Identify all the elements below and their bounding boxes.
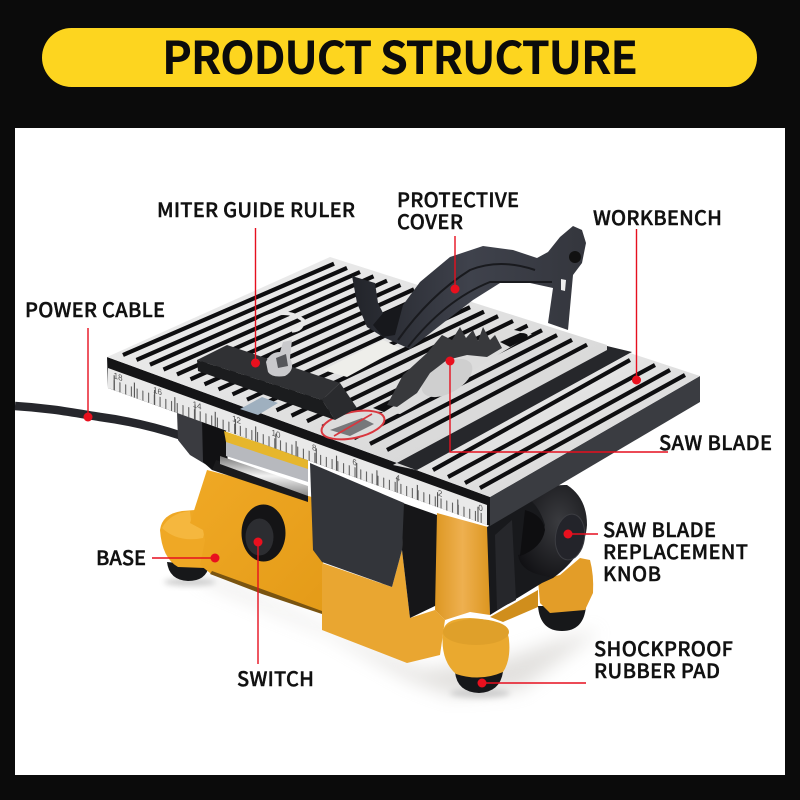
ruler ticks and numbers: 10 <box>272 427 281 440</box>
left bracket under table <box>177 412 228 470</box>
label: saw blade: SAW BLADE <box>659 427 772 456</box>
label: workbench: WORKBENCH <box>593 202 722 231</box>
main plate <box>107 257 607 497</box>
blade slots <box>373 333 528 412</box>
ruler ticks and numbers: 4 <box>396 472 400 484</box>
ground shadow <box>164 575 600 698</box>
label: saw blade replacement knob: REPLACEMENT <box>603 536 748 565</box>
label: shockproof rubber pad: SHOCKPROOF <box>594 633 733 662</box>
arm window <box>561 279 566 291</box>
miter guide ruler bar <box>197 340 357 420</box>
label: protective cover: COVER <box>397 206 463 235</box>
label: saw blade replacement knob: KNOB <box>603 558 661 587</box>
ruler ticks and numbers: 2 <box>438 487 443 499</box>
label: power cable: POWER CABLE <box>25 294 165 323</box>
wing nut <box>266 340 292 376</box>
right plate <box>417 353 700 497</box>
front foot <box>443 618 509 693</box>
saw blade replacement knob <box>518 485 587 578</box>
power cable <box>15 406 182 436</box>
white panel <box>15 128 785 775</box>
callout lines <box>88 228 668 683</box>
right plate slots <box>433 360 685 488</box>
hook detail <box>258 313 303 331</box>
ruler ticks and numbers: 8 <box>312 442 317 453</box>
front dark cover <box>310 463 404 587</box>
saw table <box>107 257 700 526</box>
rear right foot <box>490 558 593 631</box>
switch <box>242 504 286 562</box>
ruler ticks and numbers: 18 <box>114 370 123 383</box>
label: miter guide ruler: MITER GUIDE RULER <box>157 194 355 223</box>
title: PRODUCT STRUCTURE <box>162 22 638 87</box>
label: switch: SWITCH <box>237 663 314 692</box>
miter slot strip <box>323 340 400 377</box>
base: right block <box>435 513 490 620</box>
left foot <box>160 510 209 581</box>
main plate slots <box>123 264 587 450</box>
pivot screw <box>569 251 581 263</box>
ruler ticks and numbers: 12 <box>232 413 241 426</box>
motor tube with label <box>212 431 308 502</box>
ruler ticks and numbers: 14 <box>193 399 202 412</box>
cover ridges <box>398 264 552 347</box>
product sticker <box>224 431 308 469</box>
dark slot behind leg <box>402 503 437 618</box>
metal tab <box>240 397 278 415</box>
base: lower shadow edge <box>210 571 322 614</box>
channel between plates <box>393 346 632 471</box>
protective cover <box>352 226 586 349</box>
base: central leg <box>322 550 445 663</box>
ruler ticks and numbers: 16 <box>153 384 162 398</box>
ruler ticks and numbers: 6 <box>352 456 357 468</box>
warning hand sticker <box>319 406 387 444</box>
ruler ticks and numbers: 0 <box>478 502 483 514</box>
ruler ticks and numbers <box>114 370 484 519</box>
label: base: BASE <box>96 542 146 571</box>
table front edge <box>107 357 490 526</box>
cover inner shadow <box>373 305 403 337</box>
label: shockproof rubber pad: RUBBER PAD <box>594 655 720 684</box>
product: mini table saw <box>15 226 700 698</box>
callout dots <box>84 284 641 688</box>
label: saw blade replacement knob: SAW BLADE <box>603 514 716 543</box>
silver band around blade <box>372 328 532 414</box>
title banner <box>42 22 757 87</box>
label: protective cover: PROTECTIVE <box>397 184 519 213</box>
ruler <box>108 368 487 525</box>
knob housing <box>487 485 588 615</box>
table side face <box>487 376 700 526</box>
saw blade <box>387 327 502 407</box>
base: left face <box>190 470 323 612</box>
